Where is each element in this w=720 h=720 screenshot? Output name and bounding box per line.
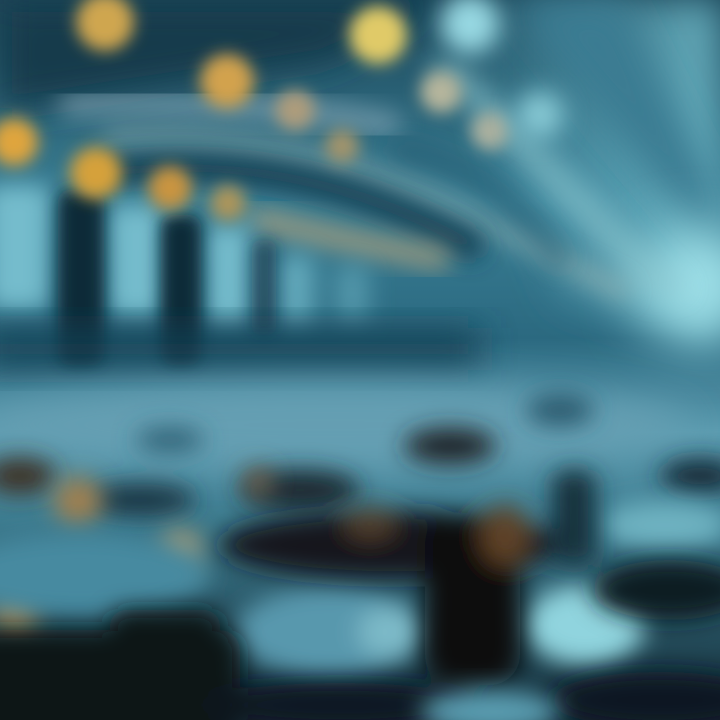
dark columns (58, 190, 276, 365)
bottom light table (420, 690, 560, 720)
warm table lamps (0, 467, 273, 639)
light table tops (0, 501, 720, 677)
distant dark tables (0, 394, 720, 516)
dark foreground furniture (0, 470, 720, 720)
curved ceiling beams (70, 104, 622, 291)
pale blue lights (440, 0, 564, 139)
ceiling and right-side glow (0, 0, 720, 340)
light floor band (0, 383, 690, 467)
warm ceiling lights (0, 0, 509, 221)
dark band under the columns (0, 328, 480, 370)
light panels between columns (0, 185, 369, 327)
